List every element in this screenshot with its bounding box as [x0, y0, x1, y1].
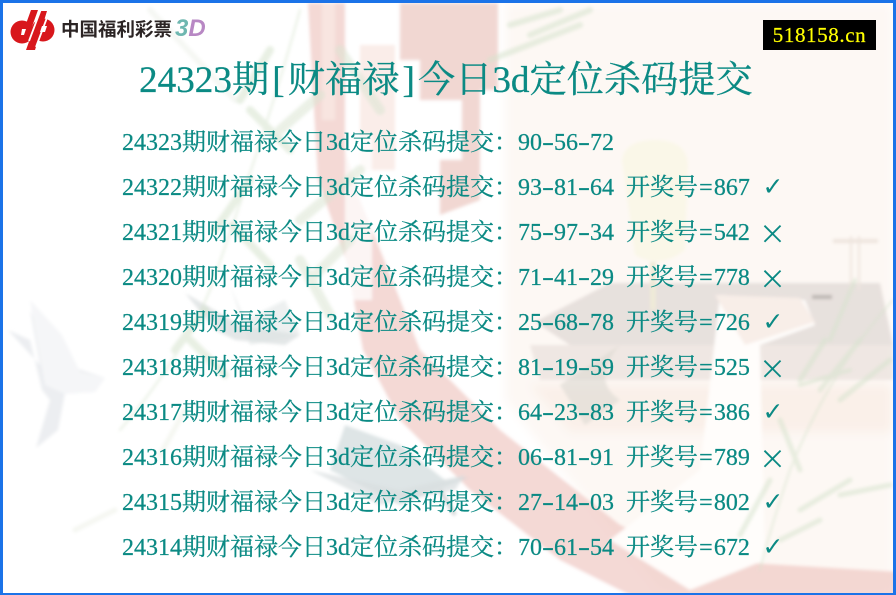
row 24321: - [542, 220, 554, 246]
title: [ [272, 60, 285, 101]
row 24315: 24315期财福禄今日3d定位杀码提交：27 14 03 开奖号 802 [122, 490, 750, 516]
swallows [8, 310, 105, 448]
row 24317: = [699, 400, 713, 426]
row 24317: ✓ [763, 397, 783, 426]
row 24315: - [578, 490, 590, 516]
row 24314: - [542, 535, 554, 561]
row 24320: 24320期财福禄今日3d定位杀码提交：71 41 29 开奖号 778 [122, 265, 750, 291]
row 24322: - [542, 175, 554, 201]
row 24318 [122, 348, 786, 387]
row 24317: 24317期财福禄今日3d定位杀码提交：64 23 83 开奖号 386 [122, 400, 750, 426]
row 24322: = [699, 175, 713, 201]
row 24316: - [578, 445, 590, 471]
row 24314: = [699, 535, 713, 561]
row 24321 [122, 213, 786, 252]
row 24315: = [699, 490, 713, 516]
row 24319: - [542, 310, 554, 336]
row 24318: 24318期财福禄今日3d定位杀码提交：81 19 59 开奖号 525 [122, 355, 750, 381]
row 24316: × [759, 438, 786, 477]
row 24318: = [699, 355, 713, 381]
row 24317: - [578, 400, 590, 426]
site badge [763, 20, 876, 50]
logo wordmark: 中国福利彩票 [61, 16, 172, 42]
logo 3D mark: 3D [175, 15, 206, 42]
row 24321: = [699, 220, 713, 246]
title: 24323期 财福禄 今日3d定位杀码提交 [139, 60, 753, 101]
row 24318: × [759, 348, 786, 387]
site badge: 518158.cn [773, 23, 866, 47]
row 24319: ✓ [763, 307, 783, 336]
row 24315: - [542, 490, 554, 516]
row 24322: ✓ [763, 172, 783, 201]
row 24317: - [542, 400, 554, 426]
title: ] [402, 60, 415, 101]
row 24320: - [542, 265, 554, 291]
row 24316: = [699, 445, 713, 471]
row 24321: × [759, 213, 786, 252]
row 24320: × [759, 258, 786, 297]
row 24314: ✓ [763, 532, 783, 561]
row 24323: 24323期财福禄今日3d定位杀码提交：90 56 72 [122, 130, 614, 156]
row 24315: ✓ [763, 487, 783, 516]
row 24321: - [578, 220, 590, 246]
row 24316 [122, 438, 786, 477]
row 24322: - [578, 175, 590, 201]
row 24319: 24319期财福禄今日3d定位杀码提交：25 68 78 开奖号 726 [122, 310, 750, 336]
icon: lottery emblem [10, 10, 54, 50]
row 24320: - [578, 265, 590, 291]
row 24322: 24322期财福禄今日3d定位杀码提交：93 81 64 开奖号 867 [122, 175, 750, 201]
row 24319: - [578, 310, 590, 336]
row 24314: 24314期财福禄今日3d定位杀码提交：70 61 54 开奖号 672 [122, 535, 750, 561]
row 24316: - [542, 445, 554, 471]
row 24320 [122, 258, 786, 297]
row 24316: 24316期财福禄今日3d定位杀码提交：06 81 91 开奖号 789 [122, 445, 750, 471]
row 24318: - [578, 355, 590, 381]
row 24314: - [578, 535, 590, 561]
logo: China Welfare Lottery 3D [10, 10, 206, 50]
row 24323: - [542, 130, 554, 156]
row 24319: = [699, 310, 713, 336]
row 24318: - [542, 355, 554, 381]
row 24321: 24321期财福禄今日3d定位杀码提交：75 97 34 开奖号 542 [122, 220, 750, 246]
row 24320: = [699, 265, 713, 291]
row 24323: - [578, 130, 590, 156]
